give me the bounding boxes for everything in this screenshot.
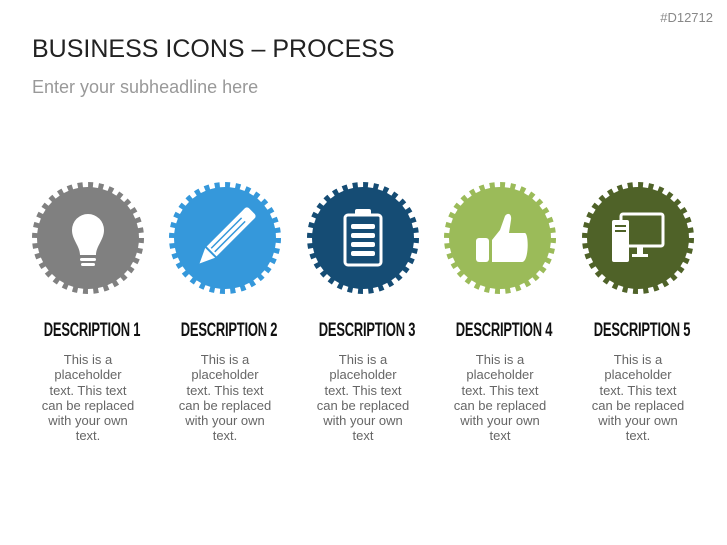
code label: #D12712: [660, 10, 713, 25]
column 4: with your own: [460, 413, 540, 428]
column 2: DESCRIPTION 2: [181, 320, 277, 341]
column 5: This is a: [614, 352, 662, 367]
column 2: [179, 320, 277, 443]
subheadline: Enter your subheadline here: [32, 77, 258, 97]
column 3: [317, 320, 415, 443]
column 4: DESCRIPTION 4: [456, 320, 552, 341]
column 4: [454, 320, 552, 443]
title: BUSINESS ICONS – PROCESS: [32, 35, 395, 63]
column 2: This is a: [201, 352, 249, 367]
gear 5: computer: [585, 185, 691, 291]
column 3: can be replaced: [317, 398, 409, 413]
column 5: placeholder: [604, 367, 672, 382]
column 1: with your own: [48, 413, 128, 428]
column 4: text: [490, 428, 510, 443]
column 5: text.: [626, 428, 650, 443]
column 2: text. This text: [186, 383, 264, 398]
column 5: can be replaced: [592, 398, 684, 413]
column 1: text. This text: [49, 383, 127, 398]
column 1: DESCRIPTION 1: [44, 320, 140, 341]
column 4: This is a: [476, 352, 524, 367]
column 3: text: [353, 428, 373, 443]
gear 3: clipboard: [310, 185, 416, 291]
column 1: can be replaced: [42, 398, 134, 413]
column 2: placeholder: [191, 367, 259, 382]
gear 2: pencil: [172, 185, 278, 291]
column 5: [592, 320, 690, 443]
column 2: can be replaced: [179, 398, 271, 413]
column 3: DESCRIPTION 3: [319, 320, 415, 341]
column 5: text. This text: [599, 383, 677, 398]
column 3: with your own: [323, 413, 403, 428]
column 3: This is a: [339, 352, 387, 367]
column 3: text. This text: [324, 383, 402, 398]
column 1: placeholder: [54, 367, 122, 382]
column 5: with your own: [598, 413, 678, 428]
column 4: placeholder: [466, 367, 534, 382]
column 3: placeholder: [329, 367, 397, 382]
column 2: with your own: [185, 413, 265, 428]
column 1: This is a: [64, 352, 112, 367]
column 5: DESCRIPTION 5: [594, 320, 690, 341]
column 1: [42, 320, 140, 443]
gear 4: thumbs up: [447, 185, 553, 291]
gear 1: bulb: [35, 185, 141, 291]
column 4: can be replaced: [454, 398, 546, 413]
column 1: text.: [76, 428, 100, 443]
column 2: text.: [213, 428, 237, 443]
column 4: text. This text: [461, 383, 539, 398]
